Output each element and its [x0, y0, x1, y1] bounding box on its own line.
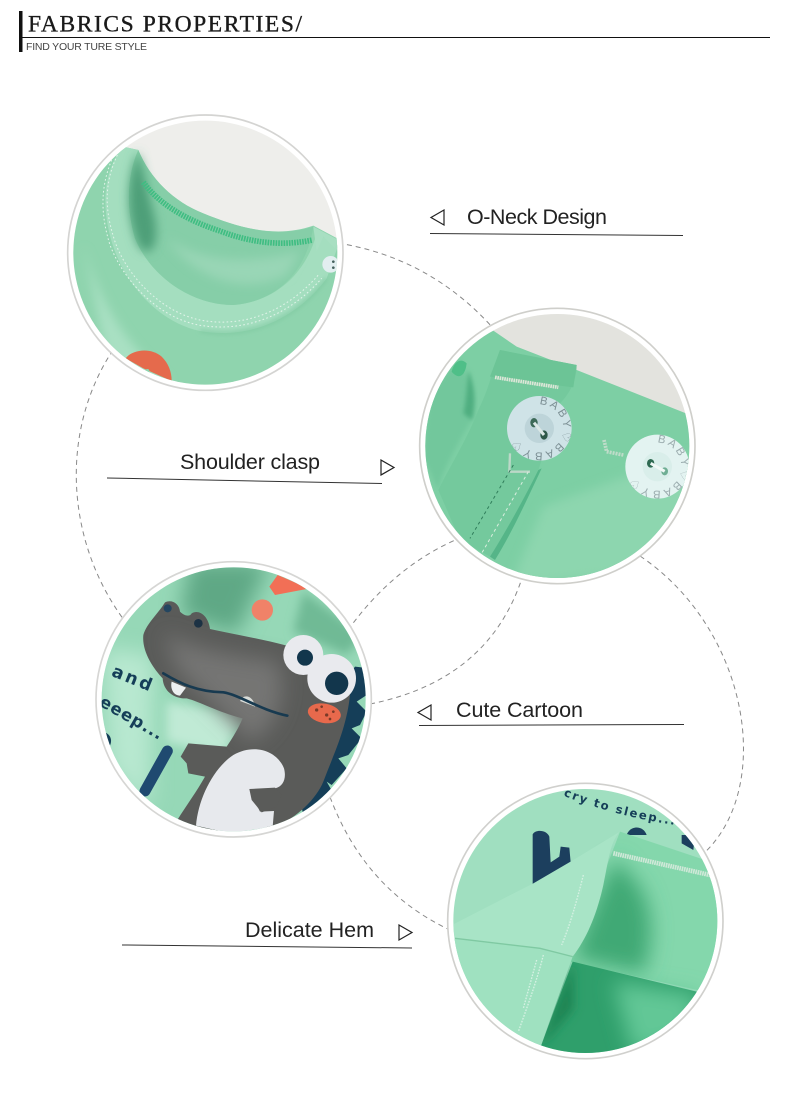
right hem panel: [570, 832, 720, 995]
hem seam: [613, 853, 710, 875]
belly: [196, 749, 285, 833]
placket stitching: [495, 377, 558, 387]
label: Shoulder clasp: Shoulder clasp: [180, 450, 320, 474]
button placket: [438, 350, 577, 557]
header: [19, 11, 770, 53]
second button with BABY lettering: BABY♡BABY♡: [630, 434, 688, 498]
printed bar: [145, 751, 167, 791]
header title: FABRICS PROPERTIES/: [28, 12, 302, 38]
cheek: [308, 703, 341, 724]
neck interior: [129, 150, 313, 305]
label: Shoulder clasp: [107, 450, 394, 484]
label: O-Neck Design: O-Neck Design: [467, 205, 607, 229]
crocodile hand: [249, 788, 276, 812]
fabric folds: [180, 562, 270, 635]
label: Cute Cartoon: Cute Cartoon: [456, 698, 583, 722]
shirt body: [425, 330, 690, 578]
printed lettering: and: [109, 662, 155, 696]
header subtitle: FIND YOUR TURE STYLE: [26, 41, 147, 53]
shoulder button: [322, 256, 339, 273]
printed caption: cry to sleep...: [564, 790, 674, 825]
mouth and teeth: [171, 682, 186, 696]
googly eyes: [283, 635, 323, 675]
dashed connectors: [76, 243, 743, 930]
buttonhole: [604, 440, 623, 455]
folded corner: [452, 832, 620, 957]
photo circle: o-neck collar: [66, 114, 344, 392]
collar band: [105, 147, 338, 333]
crocodile body: [143, 601, 350, 832]
header accent bar: [19, 11, 22, 52]
label: Delicate Hem: Delicate Hem: [245, 918, 374, 942]
lower left panel: [450, 938, 573, 1048]
shirt body: [73, 147, 338, 385]
photo circle: cartoon crocodile: eeep...: [96, 692, 166, 743]
orange print: [126, 350, 172, 381]
label: Cute Cartoon: [418, 698, 684, 726]
lower shadow panel: [540, 962, 697, 1062]
button with BABY lettering: BABY♡BABY♡: [512, 396, 572, 460]
neck opening: [425, 361, 469, 482]
label: O-Neck Design: [430, 205, 683, 236]
printed navy letters: [533, 831, 571, 888]
header rule: [22, 37, 770, 38]
neck seam: [143, 182, 313, 243]
photo circle: delicate hem: [446, 782, 724, 1060]
photo circle: shoulder buttons: [418, 308, 696, 584]
shoulder placket: [314, 227, 337, 244]
orange shapes: [252, 599, 273, 621]
spikes: [302, 666, 366, 812]
label: Delicate Hem: [122, 918, 412, 948]
photo circle: cartoon crocodile: [95, 560, 372, 838]
fold stitching: [518, 875, 583, 1032]
collar stitching: [103, 155, 322, 327]
